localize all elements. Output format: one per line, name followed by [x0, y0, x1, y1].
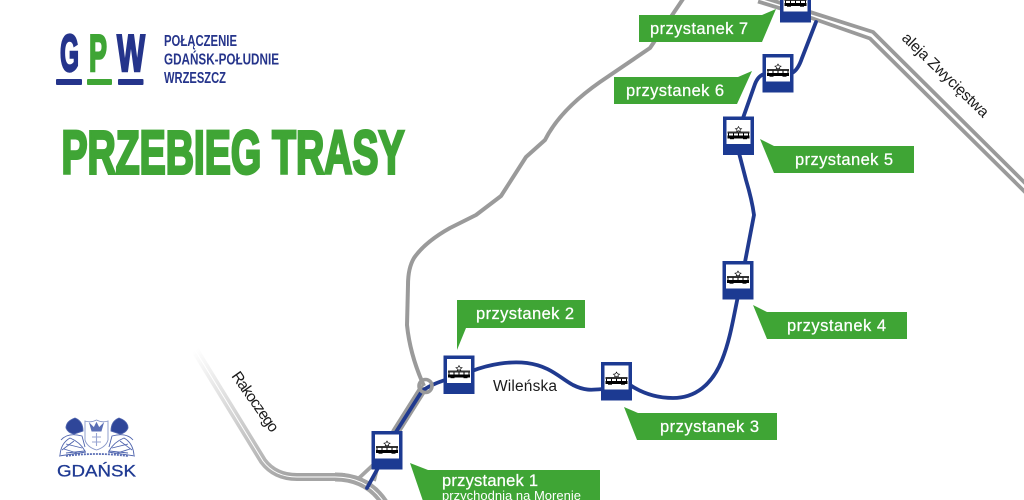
road: aleja Zwycięstwa — [758, 0, 1024, 195]
callout: przystanek 3 — [624, 407, 777, 440]
crown and cross — [90, 423, 103, 446]
logo: GPW: G — [60, 25, 79, 83]
callout: przystanek 4 — [753, 305, 907, 339]
callout: przystanek 5 — [760, 139, 914, 173]
title: PRZEBIEG TRASY — [62, 118, 404, 186]
logo: GPW — [56, 25, 146, 85]
logo tagline — [164, 33, 279, 87]
callout: przystanek 2: przystanek 2 — [476, 305, 574, 323]
logo: GPW: P — [89, 25, 107, 83]
road: section under the tram line — [395, 387, 424, 433]
logo: Gdańsk coat of arms — [57, 418, 137, 480]
callout: przystanek 6: przystanek 6 — [626, 82, 724, 100]
stop sign 4 — [722, 261, 754, 300]
ribbon — [66, 454, 128, 456]
stop sign 6 — [762, 54, 794, 92]
callout: przystanek 2 — [457, 300, 585, 350]
callout: przystanek 1 — [410, 463, 600, 500]
callout: przystanek 6 — [614, 71, 752, 104]
street label: aleja Zwycięstwa: aleja Zwycięstwa — [898, 30, 992, 121]
road: junction at bottom — [335, 465, 385, 500]
road: thin grey street — [407, 0, 685, 386]
shield — [85, 420, 108, 450]
callout: przystanek 4: przystanek 4 — [787, 317, 886, 335]
roundabout — [419, 380, 432, 392]
callout: przystanek 3: przystanek 3 — [660, 418, 759, 436]
stop sign 2 — [444, 356, 474, 394]
logo: GPW: W — [117, 25, 146, 83]
logo tagline: WRZESZCZ — [164, 70, 226, 87]
stop sign 1 — [372, 431, 402, 470]
callout: przystanek 1: przystanek 1 — [442, 472, 538, 490]
wordmark: GDAŃSK — [57, 462, 137, 480]
logo tagline: GDAŃSK-POŁUDNIE — [164, 52, 279, 68]
street label: Wileńska: Wileńska — [493, 378, 557, 395]
left lion — [59, 418, 86, 456]
stop sign 5 — [723, 116, 754, 155]
right lion — [108, 418, 135, 456]
logo tagline: POŁĄCZENIE — [164, 33, 237, 50]
callout: przystanek 5: przystanek 5 — [795, 151, 893, 169]
callout: przystanek 7: przystanek 7 — [650, 20, 748, 38]
tram route line — [367, 22, 816, 488]
stop sign 3 — [601, 362, 632, 400]
stop sign 7 — [780, 0, 811, 22]
street label: Rakoczego: Rakoczego — [228, 369, 282, 436]
callout: przystanek 7 — [639, 9, 776, 42]
road: Rakoczego — [195, 350, 345, 477]
